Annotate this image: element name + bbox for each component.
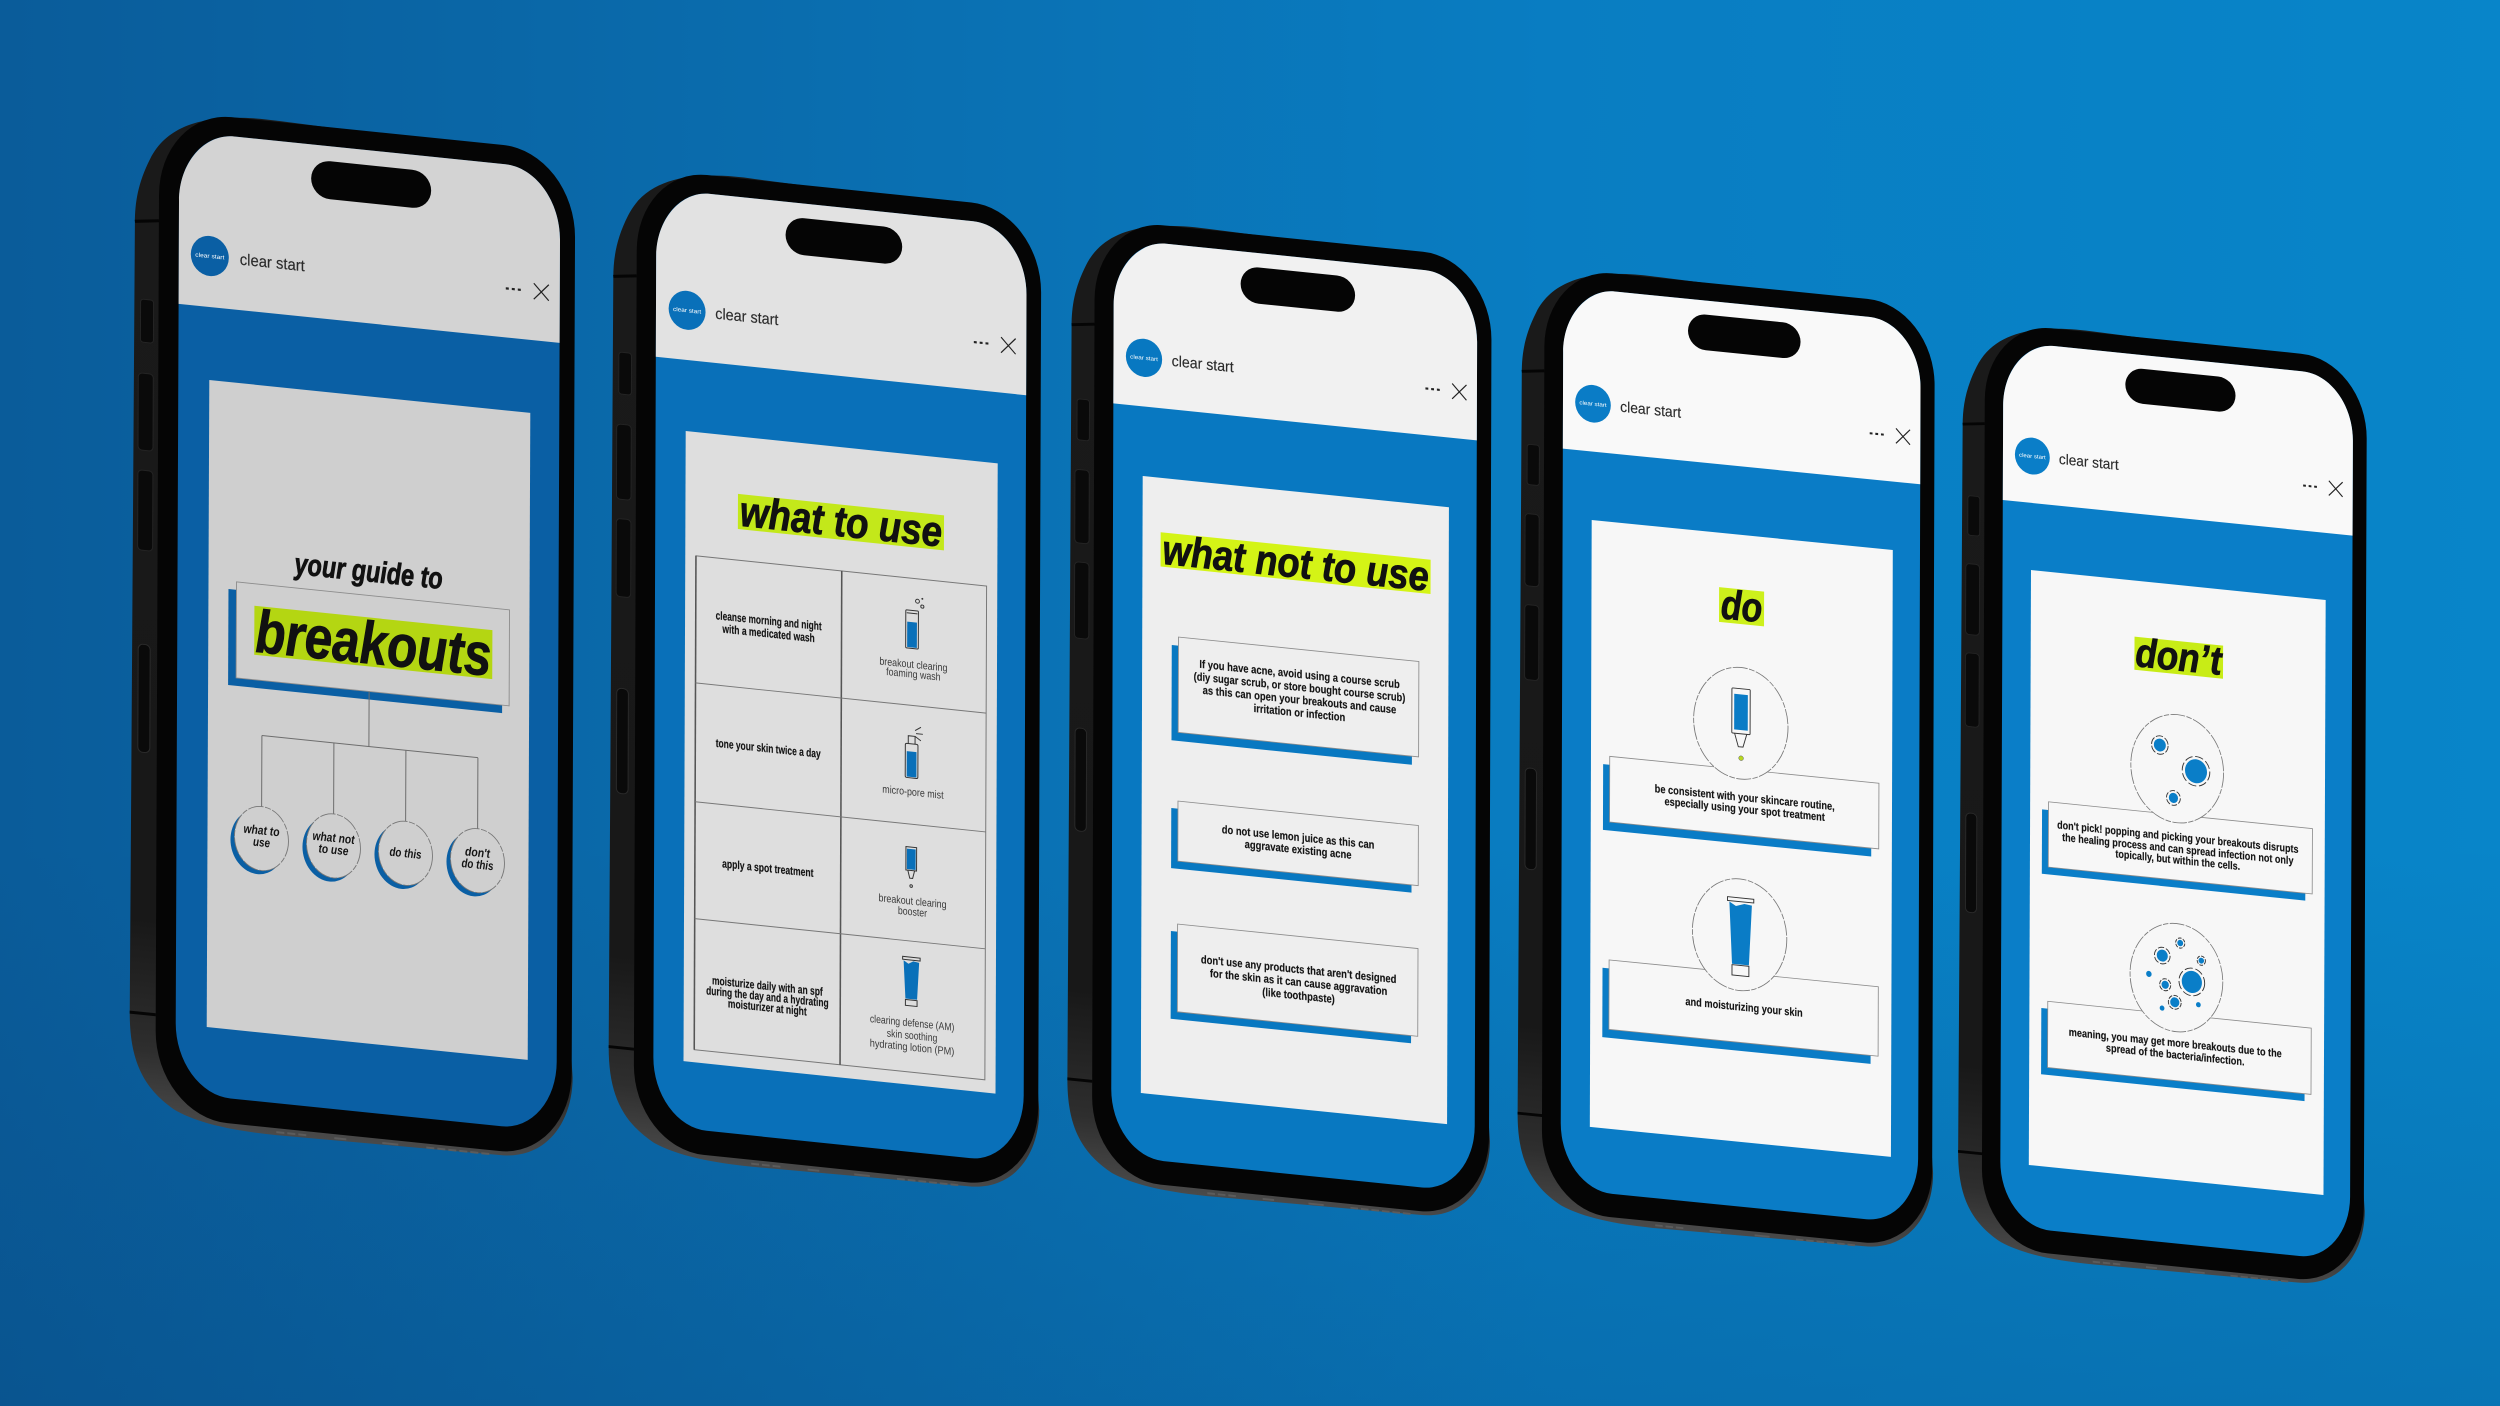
row 1: cleanse: with a medicated wash (722, 623, 815, 645)
tip box: spot treatment (1603, 756, 1879, 857)
tip box: lemon juice: aggravate existing acne (1245, 839, 1352, 862)
circle: don't do this: don't (465, 844, 491, 861)
circle: do this (374, 818, 433, 892)
heading: what not to use: what not to use (1162, 526, 1429, 600)
row 2: tone: micro-pore mist (882, 783, 944, 802)
screen (653, 188, 1027, 1164)
row 4: moisturize: during the day and a hydrating (706, 984, 829, 1010)
circle: what to use: what to (243, 822, 280, 839)
row 1: cleanse: foaming wash (886, 666, 941, 684)
circle: don't do this (446, 825, 505, 899)
notch (1688, 313, 1801, 360)
story header: account (1126, 337, 1234, 386)
topic circles (230, 803, 505, 899)
story header: account: clear start (1620, 399, 1682, 422)
phone 4: do (1517, 263, 1936, 1256)
tip box: more breakouts: spread of the bacteria/infection. (2106, 1042, 2245, 1069)
story header: account (2015, 436, 2119, 483)
phone body (608, 164, 1042, 1197)
title box: breakouts (228, 581, 510, 714)
title box: breakouts: breakouts (255, 598, 491, 689)
story header: account: clear start (240, 251, 305, 275)
circle: what to use: use (253, 835, 270, 850)
phone 2: what to use (608, 164, 1042, 1197)
heading: do: do (1721, 581, 1762, 631)
card (1590, 520, 1893, 1157)
tree connector lines (262, 681, 478, 838)
illustration: many spots in circle (2130, 919, 2223, 1036)
phone 1: your guide to breakouts (129, 106, 576, 1166)
icon: more and close (2303, 478, 2343, 497)
circle: what to use (230, 803, 289, 877)
row 2: tone: tone your skin twice a day (716, 737, 821, 761)
screen (2000, 341, 2353, 1261)
card (1141, 476, 1449, 1124)
icon: more and close (1425, 381, 1466, 400)
tip box: lemon juice (1171, 800, 1418, 893)
story header: account: clear start (1579, 400, 1607, 409)
card (207, 380, 530, 1060)
row 4: moisturize: skin soothing (887, 1028, 937, 1045)
story header: account: clear start (715, 306, 779, 329)
row 1: cleanse: breakout clearing (879, 656, 947, 675)
story header: account: clear start (2059, 452, 2119, 474)
tip box: lemon juice: do not use lemon juice as this can (1222, 824, 1374, 852)
tip box: more breakouts (2041, 1001, 2311, 1102)
row 4: moisturize: hydrating lotion (PM) (870, 1037, 954, 1058)
tip box: don't pick: the healing process and can spread infection not only (2062, 832, 2294, 868)
card (684, 431, 998, 1094)
icon: more and close (506, 280, 549, 301)
icon: mist bottle (905, 726, 923, 779)
phone body (1958, 318, 2368, 1292)
tip box: toothpaste: don't use any products that aren't designed (1201, 954, 1396, 986)
tip box: don't pick (2042, 801, 2312, 901)
notch (2125, 367, 2236, 413)
icon: booster (906, 847, 917, 888)
circle: what not to use (302, 811, 361, 885)
phone 5: don't (1958, 318, 2368, 1292)
circle: don't do this: do this (461, 856, 494, 873)
illustration: tube in circle (1692, 874, 1787, 995)
row 1: cleanse: cleanse morning and night (716, 609, 822, 633)
notch (311, 159, 431, 210)
row 3: spot treatment (722, 827, 947, 922)
circle: what not to use: to use (318, 841, 349, 858)
story header: account: clear start (1172, 353, 1234, 376)
screen (1561, 286, 1921, 1224)
row 2: tone (716, 706, 944, 802)
tip box: moisturizing: and moisturizing your skin (1685, 996, 1803, 1020)
row 3: spot treatment: booster (898, 905, 927, 920)
row 3: spot treatment: apply a spot treatment (722, 857, 814, 880)
icon: more and close (1870, 426, 1910, 445)
phone body (1067, 215, 1493, 1225)
tip box: toothpaste: (like toothpaste) (1262, 987, 1335, 1006)
heading: what to use: what to use (740, 488, 942, 557)
notch (1241, 266, 1355, 314)
tip box: toothpaste: for the skin as it can cause aggravation (1210, 968, 1387, 998)
tip box: spot treatment: be consistent with your skincare routine, (1655, 783, 1835, 813)
illustration: three spots in circle (2131, 710, 2224, 827)
phone body (1517, 263, 1936, 1256)
row 3: spot treatment: breakout clearing (879, 892, 947, 911)
tip box: acne scrub: irritation or infection (1254, 703, 1345, 724)
tip box: acne scrub (1171, 636, 1419, 765)
tip box: spot treatment: especially using your spot treatment (1664, 796, 1825, 824)
notch (786, 216, 902, 265)
tip box: more breakouts: meaning, you may get more breakouts due to the (2069, 1027, 2282, 1060)
icon: tube (902, 956, 920, 1007)
story header: account: clear start (195, 253, 225, 262)
row 4: moisturize (706, 936, 955, 1058)
story header: account: clear start (673, 307, 702, 316)
icon: more and close (974, 334, 1016, 354)
row 1: cleanse (716, 576, 948, 684)
screen (175, 131, 560, 1132)
tip box: acne scrub: If you have acne, avoid using a course scrub (1199, 659, 1400, 691)
row 4: moisturize: clearing defense (AM) (870, 1013, 954, 1034)
tip box: moisturizing (1602, 959, 1878, 1065)
story header: account (1575, 383, 1682, 431)
tip box: don't pick: topically, but within the cells. (2115, 848, 2240, 873)
card (2029, 570, 2326, 1195)
circle: do this: do this (389, 845, 422, 862)
tip box: acne scrub: (diy sugar scrub, or store bought course scrub) (1194, 671, 1406, 705)
phone body (129, 106, 576, 1166)
product table grid (694, 556, 987, 1080)
phone 3: what not to use (1067, 215, 1493, 1225)
icon: foaming wash (906, 596, 924, 650)
row 4: moisturize: moisturize daily with an spf (712, 974, 823, 999)
story header: account (669, 289, 779, 339)
heading: don't: don’t (2135, 629, 2223, 684)
row 4: moisturize: moisturizer at night (728, 997, 807, 1019)
story header: account: clear start (2019, 453, 2046, 461)
screen (1111, 238, 1477, 1193)
tip box: acne scrub: as this can open your breakouts and cause (1203, 685, 1396, 717)
circle: what not to use: what not (312, 829, 355, 847)
story header: account (191, 234, 305, 286)
story header: account: clear start (1130, 354, 1158, 363)
illustration: booster in circle (1693, 663, 1788, 784)
tip box: don't pick: don't pick! popping and picking your breakouts disrupts (2057, 819, 2299, 856)
heading: your guide to: your guide to (293, 548, 443, 596)
tip box: toothpaste (1171, 923, 1418, 1044)
